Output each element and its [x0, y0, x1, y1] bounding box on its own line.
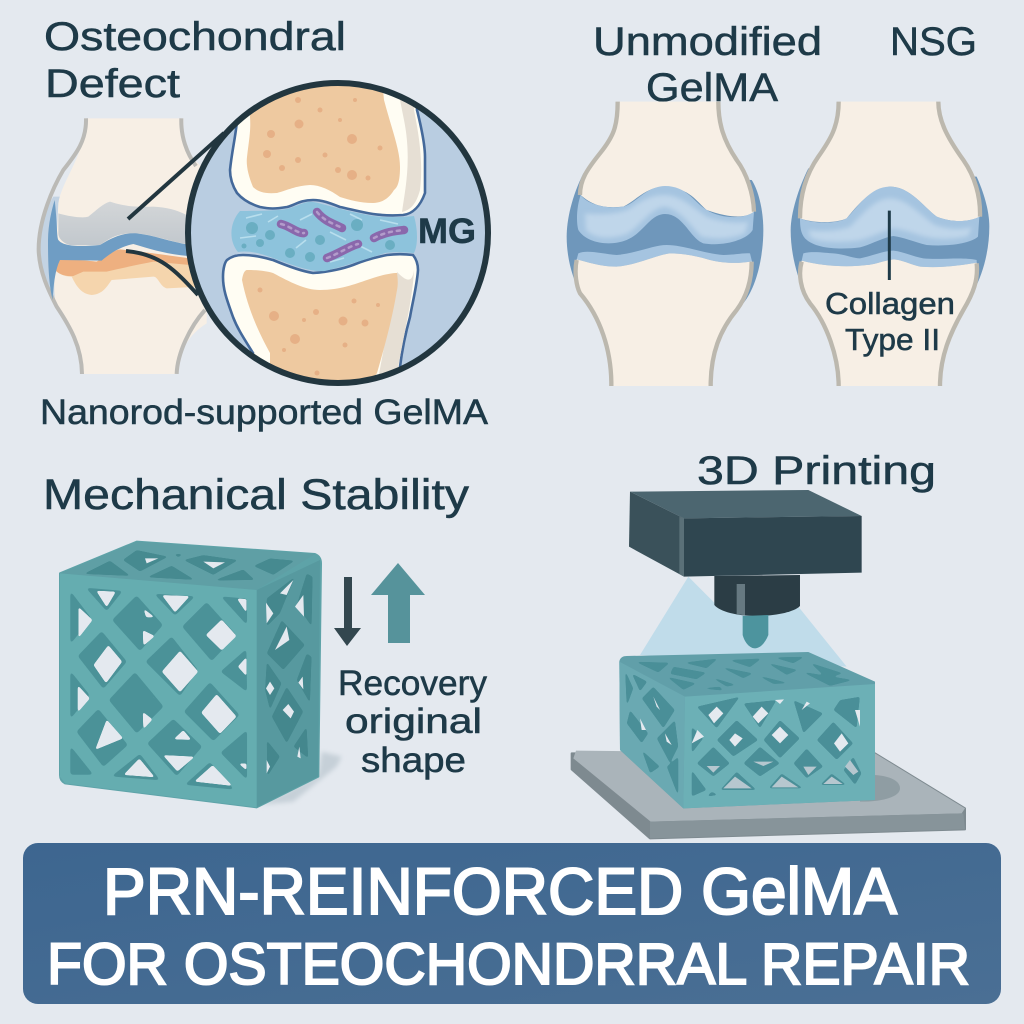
banner title: FOR OSTEOCHONDRRAL REPAIR	[47, 932, 970, 997]
heading: Unmodified GelMA: GelMA	[646, 66, 778, 110]
defect: orange damaged bone	[55, 249, 200, 295]
pointer line	[885, 211, 894, 280]
lower cartilage	[802, 251, 977, 267]
cube body	[60, 542, 321, 807]
label: Collagen Type II	[825, 286, 955, 357]
arrow: recovery up	[371, 563, 425, 643]
defect: grey damaged cartilage	[58, 202, 187, 245]
label: MG: MG	[418, 212, 476, 251]
label: Collagen Type II: Collagen	[825, 286, 955, 321]
heading: NSG: NSG	[890, 20, 977, 64]
printed lattice block	[619, 652, 875, 808]
lens: lower bone	[222, 252, 420, 380]
heading: 3D Printing: 3D Printing	[697, 449, 936, 493]
heading: Mechanical Stability: Mechanical Stability	[43, 471, 470, 519]
banner title: PRN-REINFORCED GelMA	[103, 854, 897, 928]
print bed	[572, 751, 965, 838]
cube shadow	[260, 752, 342, 805]
callout line to grey cartilage	[128, 133, 224, 219]
front holes	[78, 591, 247, 786]
front pockets	[70, 587, 247, 790]
label: Nanorod-supported GelMA: Nanorod-supported GelMA	[40, 393, 489, 432]
light beam	[640, 577, 847, 667]
callout: magnified joint lens	[126, 60, 488, 400]
heading: Osteochondral Defect: Osteochondral	[44, 15, 346, 59]
footer banner	[23, 843, 1001, 1004]
lens: upper bone	[228, 86, 426, 217]
heading: Unmodified GelMA: Unmodified	[593, 20, 822, 64]
label: Recovery original shape: shape	[361, 741, 466, 780]
label: Collagen Type II: Type II	[845, 322, 940, 357]
side pockets	[265, 573, 313, 777]
label: Recovery original shape	[338, 664, 488, 780]
illustration: unmodified GelMA joint	[567, 102, 763, 386]
upper cartilage	[577, 186, 754, 244]
lower bone	[576, 253, 752, 386]
illustration: defective knee joint	[38, 118, 207, 374]
lower cartilage	[577, 245, 752, 267]
lens: gel with nanorods	[231, 202, 417, 271]
label: Recovery original shape: Recovery	[338, 664, 488, 703]
defect: blue joint space	[48, 200, 190, 300]
banner title	[47, 854, 970, 997]
top pockets	[83, 550, 295, 581]
lower bone	[800, 259, 978, 386]
printer head	[629, 490, 862, 648]
callout line to orange bone	[126, 251, 198, 295]
label: Recovery original shape: original	[345, 702, 482, 741]
heading: Unmodified GelMA	[593, 20, 822, 110]
heading: Osteochondral Defect: Defect	[45, 62, 180, 106]
upper cartilage	[800, 187, 979, 248]
arrow: compression down	[334, 577, 361, 646]
icon: lattice hydrogel cube	[60, 542, 342, 807]
heading: Osteochondral Defect	[44, 15, 346, 106]
illustration: NSG joint	[791, 102, 989, 386]
illustration: 3D printer	[572, 490, 965, 838]
